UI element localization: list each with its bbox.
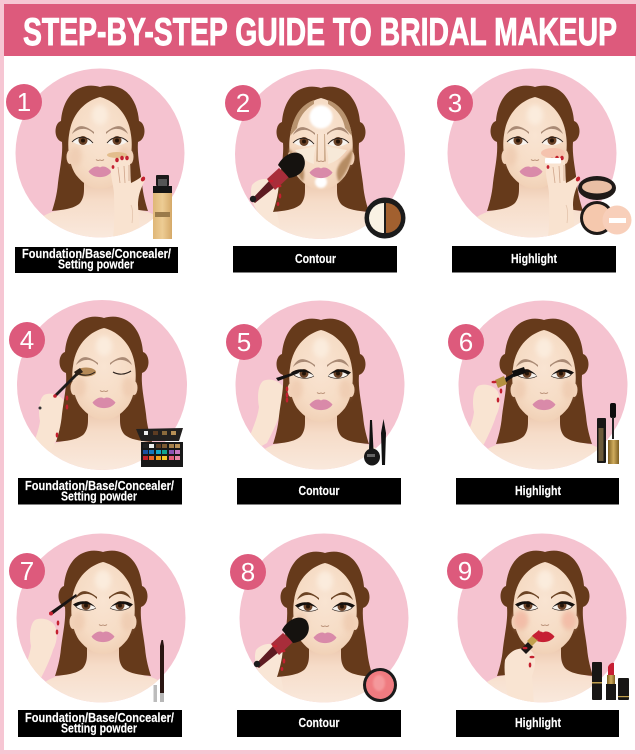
icon: eyeliner applicator [276,371,299,402]
panel: step 6 mascara [448,300,628,504]
label 6 [456,478,619,504]
number badge 2 [225,85,261,121]
number badge 9 [447,553,483,589]
label 7 [18,710,182,737]
woman with contour map [251,86,368,239]
woman and hand with puff [477,86,582,238]
icon: eyebrow pencil [154,640,164,702]
icon: lipsticks [592,662,629,700]
panel: step 9 lipstick [447,534,629,737]
woman with brow pencil and hand [28,550,158,702]
pink circle 7 [16,534,186,702]
number badge 1: 1 [17,87,31,117]
label 3 [452,246,616,272]
panel: step 1 foundation [6,68,184,273]
label 1: Setting powder [58,258,134,272]
icon: blush brush [254,618,309,671]
number badge 4: 4 [20,325,34,355]
label 7: Foundation/Base/Concealer/ [25,711,174,725]
number badge 8: 8 [241,557,255,587]
label 3: Highlight [511,252,558,266]
woman with mascara and hand [470,318,597,470]
label 7: Setting powder [61,722,137,736]
label 5: Contour [298,484,340,498]
label 4: Setting powder [61,490,137,504]
woman with closed eye and hand [36,316,152,470]
pink circle 6 [458,300,628,470]
number badge 7 [9,553,45,589]
pink circle 1 [16,68,184,238]
number badge 8 [230,554,266,590]
icon: pencil in hand [49,594,77,634]
label 2 [233,246,397,272]
number badge 3 [437,85,473,121]
icon: liquid eyeliner [364,419,386,466]
panel: step 8 blush [230,534,408,737]
number badge 2: 2 [236,88,250,118]
label 4: Foundation/Base/Concealer/ [25,479,174,493]
label 4 [18,478,182,504]
pink circle 9 [458,534,626,702]
pink circle 8 [240,534,408,702]
number badge 5: 5 [237,327,251,357]
icon: foundation bottle [153,175,172,239]
icon: blush compact [363,668,397,702]
icon: contour compact [364,198,406,238]
pink circle 4 [17,300,187,470]
number badge 7: 7 [20,556,34,586]
label 9: Highlight [515,716,562,730]
panel: step 5 eyeliner [226,300,404,504]
icon: highlighter compact and puff [578,176,632,235]
panel: step 2 contour [225,69,406,272]
pink circle 2 [235,69,405,239]
woman and hand applying foundation [44,86,153,238]
label 2: Contour [295,252,336,266]
pink circle 5 [236,300,404,470]
icon: lipstick in hand [521,630,542,668]
panel: step 3 highlight [437,68,632,272]
label 8 [237,710,401,737]
number badge 6: 6 [459,327,473,357]
number badge 9: 9 [458,556,472,586]
contour shading [289,100,353,188]
label 1 [15,247,178,273]
label 8: Contour [298,716,340,730]
woman with blush and hand [255,552,371,702]
panel: step 4 eyeshadow [9,300,187,504]
label 5 [237,478,401,504]
icon: mascara tube [597,403,619,464]
number badge 1 [6,84,42,120]
label 9 [456,710,619,737]
woman applying lipstick [487,550,592,702]
icon: eyeshadow brush [38,368,83,438]
label 1: Foundation/Base/Concealer/ [22,247,171,261]
pink circle 3 [448,68,616,238]
label 6: Highlight [515,484,562,498]
number badge 3: 3 [448,88,462,118]
icon: eyeshadow palette [136,428,183,467]
number badge 4 [9,322,45,358]
icon: mascara wand in hand [492,367,526,402]
woman with eyeliner and hand [251,318,376,470]
icon: makeup brush 2 [250,153,305,206]
number badge 5 [226,324,262,360]
number badge 6 [448,324,484,360]
panel: step 7 brow pencil [9,534,186,737]
